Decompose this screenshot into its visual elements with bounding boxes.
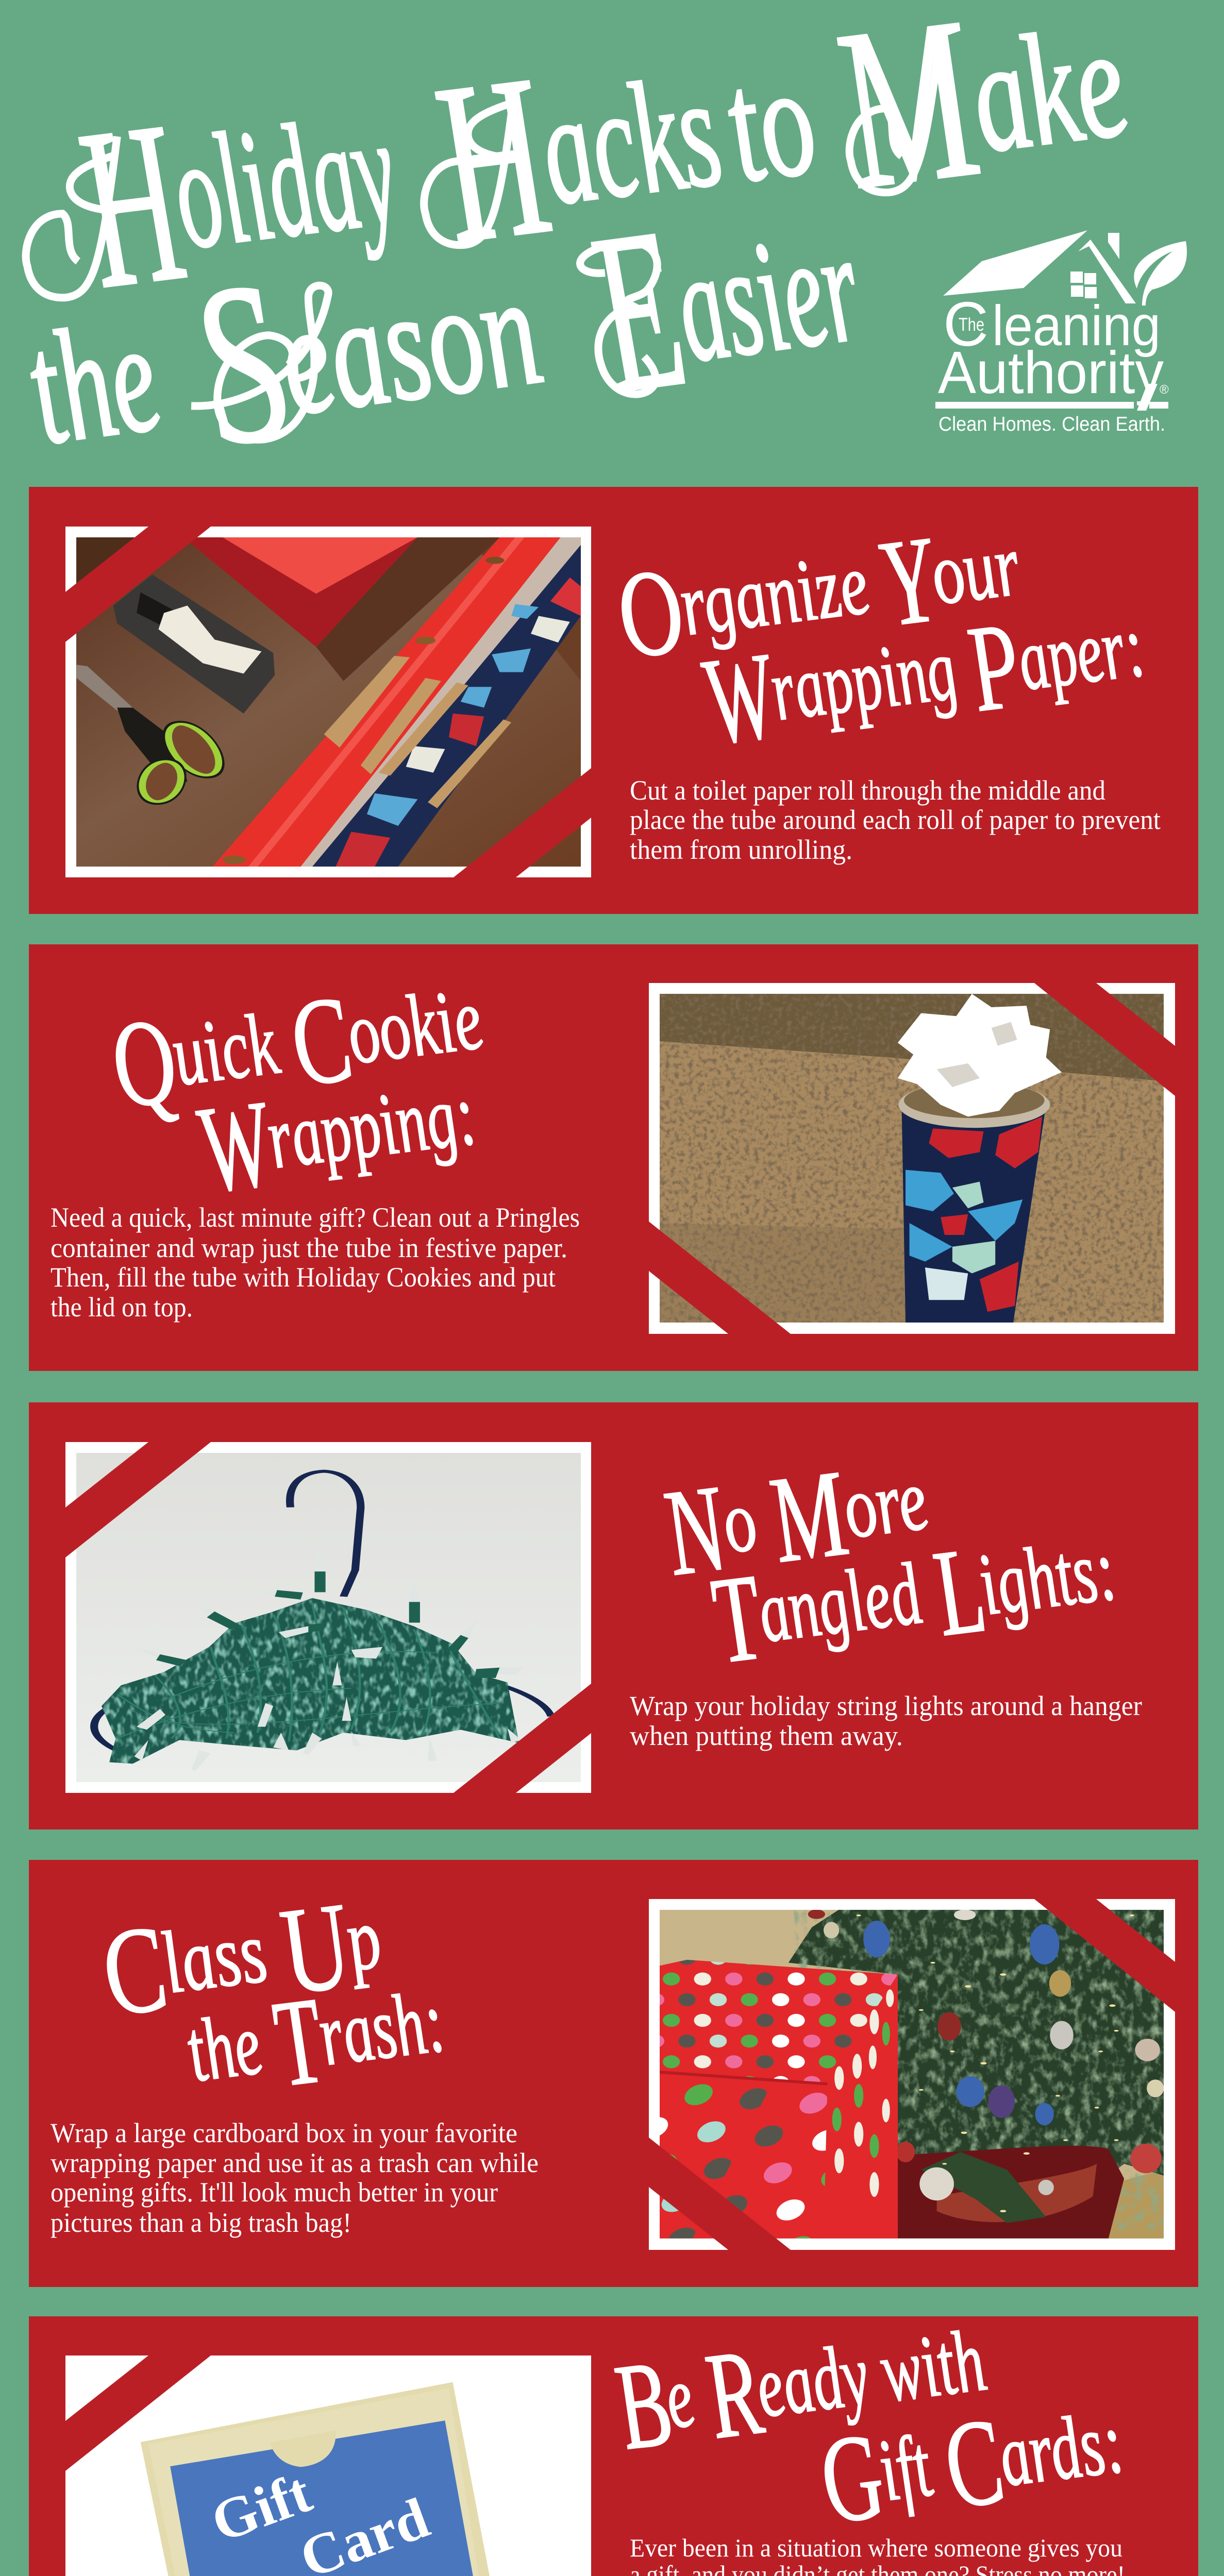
- title: acks: [518, 43, 739, 238]
- title: E: [562, 182, 711, 439]
- photo: wrapping paper rolls, tape and scissors: [70, 533, 593, 870]
- panel: no more tangled lights: [29, 1402, 1198, 1829]
- body text: [630, 1690, 1142, 1751]
- heading: ights:: [967, 1521, 1127, 1633]
- body text: when putting them away.: [630, 1720, 903, 1751]
- heading: rapping:: [255, 1066, 487, 1187]
- heading: M: [752, 1445, 866, 1588]
- body text: container and wrap just the tube in festive paper.: [51, 1232, 567, 1263]
- heading: T: [695, 1549, 782, 1689]
- heading: [94, 955, 499, 1218]
- panel: class up the trash: [29, 1860, 1198, 2287]
- heading: rash:: [307, 1973, 456, 2084]
- body text: Cut a toilet paper roll through the middle and: [630, 775, 1105, 806]
- title: [7, 0, 1154, 493]
- photo: wrapped tube with bow on granite: [656, 992, 1171, 1324]
- photo frame: [65, 1442, 591, 1793]
- title: asier: [653, 199, 881, 395]
- heading: R: [689, 2325, 775, 2464]
- heading: W: [182, 1075, 293, 1218]
- heading: [600, 501, 1162, 770]
- heading: p: [329, 1889, 392, 1990]
- title: eason: [256, 242, 558, 448]
- heading: P: [951, 598, 1036, 737]
- heading: C: [273, 971, 367, 1112]
- heading: Y: [865, 511, 958, 651]
- gift card text: Gift: [203, 2460, 320, 2554]
- heading: ore: [831, 1451, 938, 1556]
- heading: e: [652, 2346, 719, 2447]
- body text: Ever been in a situation where someone gives you: [630, 2533, 1122, 2562]
- heading: C: [927, 2394, 1019, 2534]
- title: H: [50, 75, 216, 335]
- logo: The Cleaning Authority: The: [959, 314, 984, 335]
- photo: gift card in a box: [141, 2382, 499, 2576]
- body text: Wrap your holiday string lights around a hanger: [630, 1690, 1142, 1721]
- photo frame: [649, 983, 1175, 1334]
- ribbon bands: [649, 983, 1175, 1334]
- panel: organize your wrapping paper: [29, 487, 1198, 914]
- heading: L: [916, 1522, 999, 1662]
- title: oliday: [151, 82, 416, 282]
- photo: wrapped box beside christmas tree: [656, 1908, 1171, 2241]
- heading: uick: [160, 994, 303, 1104]
- heading: aper:: [1005, 598, 1155, 708]
- body text: Wrap a large cardboard box in your favorite: [51, 2117, 517, 2148]
- heading: W: [687, 627, 796, 770]
- heading: U: [263, 1877, 370, 2020]
- photo frame: [65, 2355, 591, 2576]
- body text: wrapping paper and use it as a trash can while: [51, 2147, 539, 2178]
- body text: [630, 775, 1161, 865]
- heading: rganize: [667, 533, 895, 654]
- logo: The Cleaning Authority: Authority: [938, 339, 1164, 406]
- body text: them from unrolling.: [630, 834, 852, 865]
- heading: [598, 2297, 1141, 2549]
- ribbon bands: [65, 1442, 591, 1793]
- heading: Q: [94, 993, 192, 1134]
- logo: The Cleaning Authority: ®: [1160, 383, 1169, 397]
- heading: T: [257, 1972, 343, 2112]
- logo: The Cleaning Authority: Clean Homes. Clean Earth.: [938, 413, 1165, 435]
- heading: ookie: [334, 971, 493, 1082]
- body text: [51, 2117, 539, 2238]
- body text: the lid on top.: [51, 1292, 193, 1323]
- heading: lass: [149, 1902, 293, 2011]
- logo: The Cleaning Authority: leaning: [992, 294, 1161, 358]
- photo frame: [649, 1899, 1175, 2250]
- heading: [85, 1874, 462, 2123]
- heading: ift: [867, 2416, 957, 2519]
- title: H: [405, 28, 583, 290]
- logo: The Cleaning Authority: [935, 230, 1187, 435]
- heading: G: [803, 2408, 898, 2549]
- logo: The Cleaning Authority: C: [943, 289, 988, 359]
- title: to: [705, 32, 833, 215]
- body text: [51, 1202, 580, 1323]
- photo: string lights on a hanger: [70, 1452, 593, 1785]
- body text: place the tube around each roll of paper to prevent: [630, 804, 1161, 835]
- ribbon bands: [649, 1899, 1175, 2250]
- gift card text: [215, 2477, 432, 2573]
- heading: rapping: [758, 619, 981, 739]
- ribbon bands: [65, 2355, 591, 2576]
- body text: Then, fill the tube with Holiday Cookies and put: [51, 1262, 556, 1293]
- heading: o: [710, 1470, 783, 1571]
- heading: C: [85, 1901, 182, 2042]
- heading: O: [600, 543, 699, 684]
- body text: Need a quick, last minute gift? Clean out a Pringles: [51, 1202, 580, 1233]
- heading: eady with: [743, 2312, 996, 2435]
- ribbon bands: [65, 527, 591, 877]
- heading: the: [175, 1991, 308, 2100]
- heading: [646, 1435, 1133, 1689]
- photo frame: [65, 527, 591, 877]
- body text: pictures than a big trash bag!: [51, 2207, 351, 2238]
- heading: angled: [745, 1544, 947, 1660]
- heading: our: [918, 517, 1032, 623]
- title: the: [7, 289, 177, 477]
- panel: be ready with gift cards: [29, 2297, 1198, 2576]
- body text: opening gifts. It'll look much better in your: [51, 2177, 498, 2208]
- title flourishes: [26, 31, 941, 439]
- heading: N: [646, 1460, 746, 1601]
- body text: [630, 2533, 1159, 2576]
- panel: quick cookie wrapping: [29, 944, 1198, 1371]
- heading: ards:: [986, 2394, 1134, 2504]
- heading: B: [598, 2336, 684, 2476]
- title: S: [167, 235, 313, 493]
